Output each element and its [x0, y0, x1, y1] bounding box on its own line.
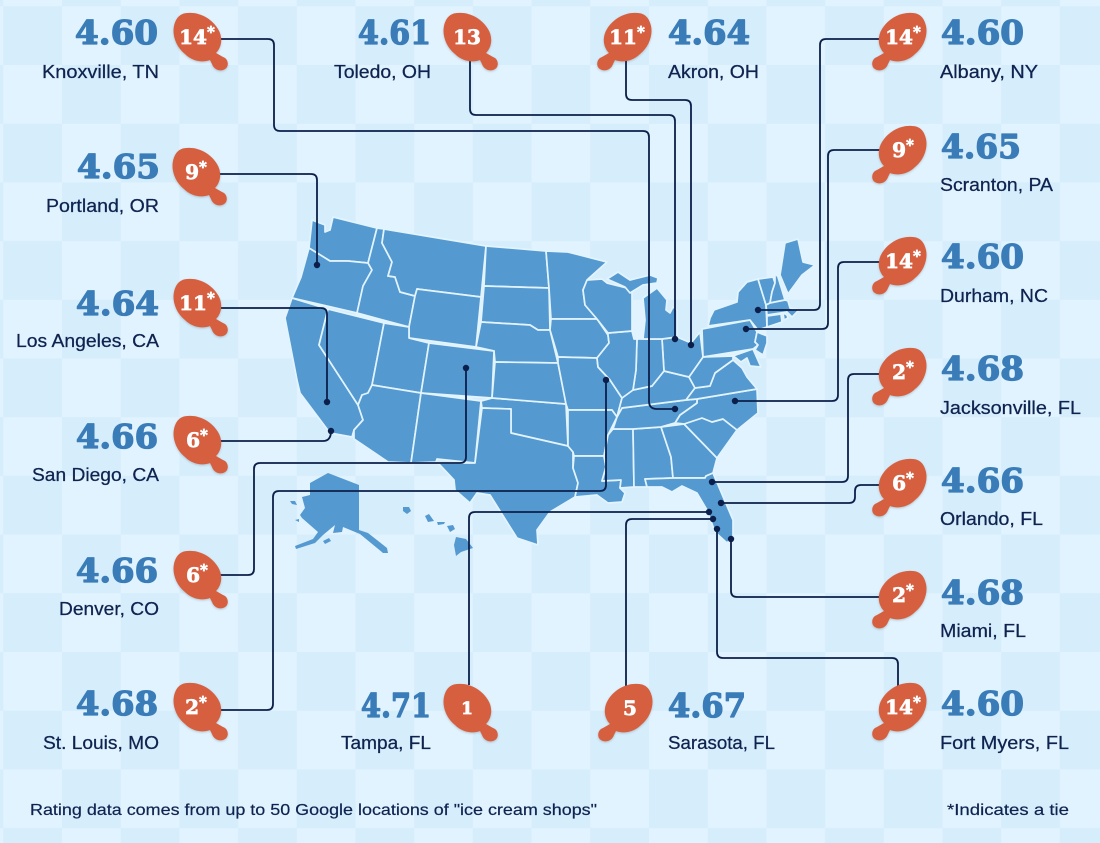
- city: Denver: Denver, CO: [59, 599, 159, 619]
- city: Denver: 4.66: [76, 551, 158, 590]
- city: Orlando: Orlando, FL: [940, 509, 1043, 529]
- city: Knoxville: 4.60: [75, 13, 158, 52]
- footnote: tie: *Indicates a tie: [947, 802, 1069, 819]
- city: San Diego: *: [200, 426, 208, 444]
- city: St. Louis: [43, 683, 228, 753]
- city: Miami: *: [906, 581, 914, 599]
- city: St. Louis: 4.68: [76, 684, 158, 723]
- city: Fort Myers: Fort Myers, FL: [940, 733, 1069, 753]
- city: Tampa: 4.71: [361, 686, 431, 725]
- city: Akron: Akron, OH: [668, 62, 759, 82]
- city: Toledo: 4.61: [358, 13, 431, 52]
- city: Jacksonville: [872, 348, 1081, 418]
- city: Scranton: [872, 126, 1053, 195]
- city: Fort Myers: 4.60: [941, 684, 1024, 723]
- city: Jacksonville: 4.68: [941, 349, 1024, 388]
- city: Fort Myers: [872, 683, 1069, 753]
- city: Knoxville: 14: [179, 25, 207, 49]
- city: Los Angeles: Los Angeles, CA: [16, 331, 159, 351]
- city: Scranton: 9: [892, 138, 906, 162]
- city: St. Louis: *: [199, 693, 207, 711]
- city: Scranton: Scranton, PA: [940, 175, 1053, 195]
- city: Orlando: 6: [892, 471, 906, 495]
- city: Albany: *: [913, 23, 921, 41]
- city: Fort Myers: *: [913, 693, 921, 711]
- city: Jacksonville: *: [906, 358, 914, 376]
- city: San Diego: 4.66: [76, 417, 158, 456]
- city: Toledo: Toledo, OH: [334, 62, 431, 82]
- map: United States: [285, 217, 815, 556]
- city: Miami: 2: [892, 583, 906, 607]
- city: Durham: 4.60: [941, 237, 1024, 276]
- footnote: data source: Rating data comes from up to 50 Google locations of "ice cream shops": [30, 802, 597, 819]
- city: Tampa: Tampa, FL: [341, 733, 431, 753]
- city: St. Louis: 2: [185, 695, 199, 719]
- city: Orlando: [872, 459, 1043, 529]
- city: Sarasota: [598, 684, 775, 753]
- city: Albany: [872, 13, 1038, 82]
- city: Miami: [872, 571, 1026, 641]
- city: Durham: Durham, NC: [940, 286, 1048, 306]
- city: Miami: 4.68: [941, 573, 1024, 612]
- city: Portland: 4.65: [77, 147, 160, 186]
- city: Akron: [597, 13, 759, 82]
- city: Sarasota: 5: [623, 696, 637, 720]
- city: Fort Myers: 14: [885, 695, 913, 719]
- city: St. Louis: St. Louis, MO: [43, 733, 159, 753]
- city: Orlando: *: [906, 469, 914, 487]
- city: Akron: *: [637, 23, 645, 41]
- city: Tampa: [341, 684, 498, 753]
- city: San Diego: 6: [186, 428, 200, 452]
- city: Akron: 11: [609, 25, 637, 49]
- connector lines: [220, 39, 898, 710]
- city: Scranton: 4.65: [941, 127, 1021, 166]
- city: Los Angeles: 11: [179, 291, 207, 315]
- city: Denver: [59, 551, 228, 619]
- city: Albany: Albany, NY: [940, 62, 1038, 82]
- city: Miami: Miami, FL: [940, 621, 1026, 641]
- city: Portland: Portland, OR: [46, 196, 159, 216]
- city: Los Angeles: [16, 279, 228, 351]
- city: Portland: [46, 147, 227, 216]
- city: Scranton: *: [906, 136, 914, 154]
- city: Albany: 14: [885, 25, 913, 49]
- city: Portland: 9: [185, 160, 199, 184]
- city: Knoxville: *: [207, 23, 215, 41]
- city: Orlando: 4.66: [941, 461, 1024, 500]
- city: Durham: [872, 237, 1048, 306]
- city: San Diego: [32, 416, 228, 485]
- city: Knoxville: Knoxville, TN: [42, 62, 159, 82]
- city: Toledo: 13: [453, 25, 481, 49]
- city: San Diego: San Diego, CA: [32, 465, 159, 485]
- city: Jacksonville: Jacksonville, FL: [940, 398, 1081, 418]
- city: Los Angeles: *: [207, 289, 215, 307]
- city: Denver: *: [200, 561, 208, 579]
- city: Los Angeles: 4.64: [76, 284, 159, 323]
- city: Tampa: 1: [461, 699, 473, 719]
- map location dots: [314, 262, 761, 542]
- city: Jacksonville: 2: [892, 360, 906, 384]
- city: Denver: 6: [186, 563, 200, 587]
- city: Knoxville: [42, 13, 228, 82]
- city: Sarasota: Sarasota, FL: [668, 733, 775, 753]
- city: Akron: 4.64: [668, 13, 750, 52]
- city: Albany: 4.60: [941, 13, 1024, 52]
- city: Sarasota: 4.67: [668, 686, 746, 725]
- city: Durham: *: [913, 247, 921, 265]
- city: Durham: 14: [885, 249, 913, 273]
- city: Toledo: [334, 13, 498, 82]
- city: Portland: *: [199, 158, 207, 176]
